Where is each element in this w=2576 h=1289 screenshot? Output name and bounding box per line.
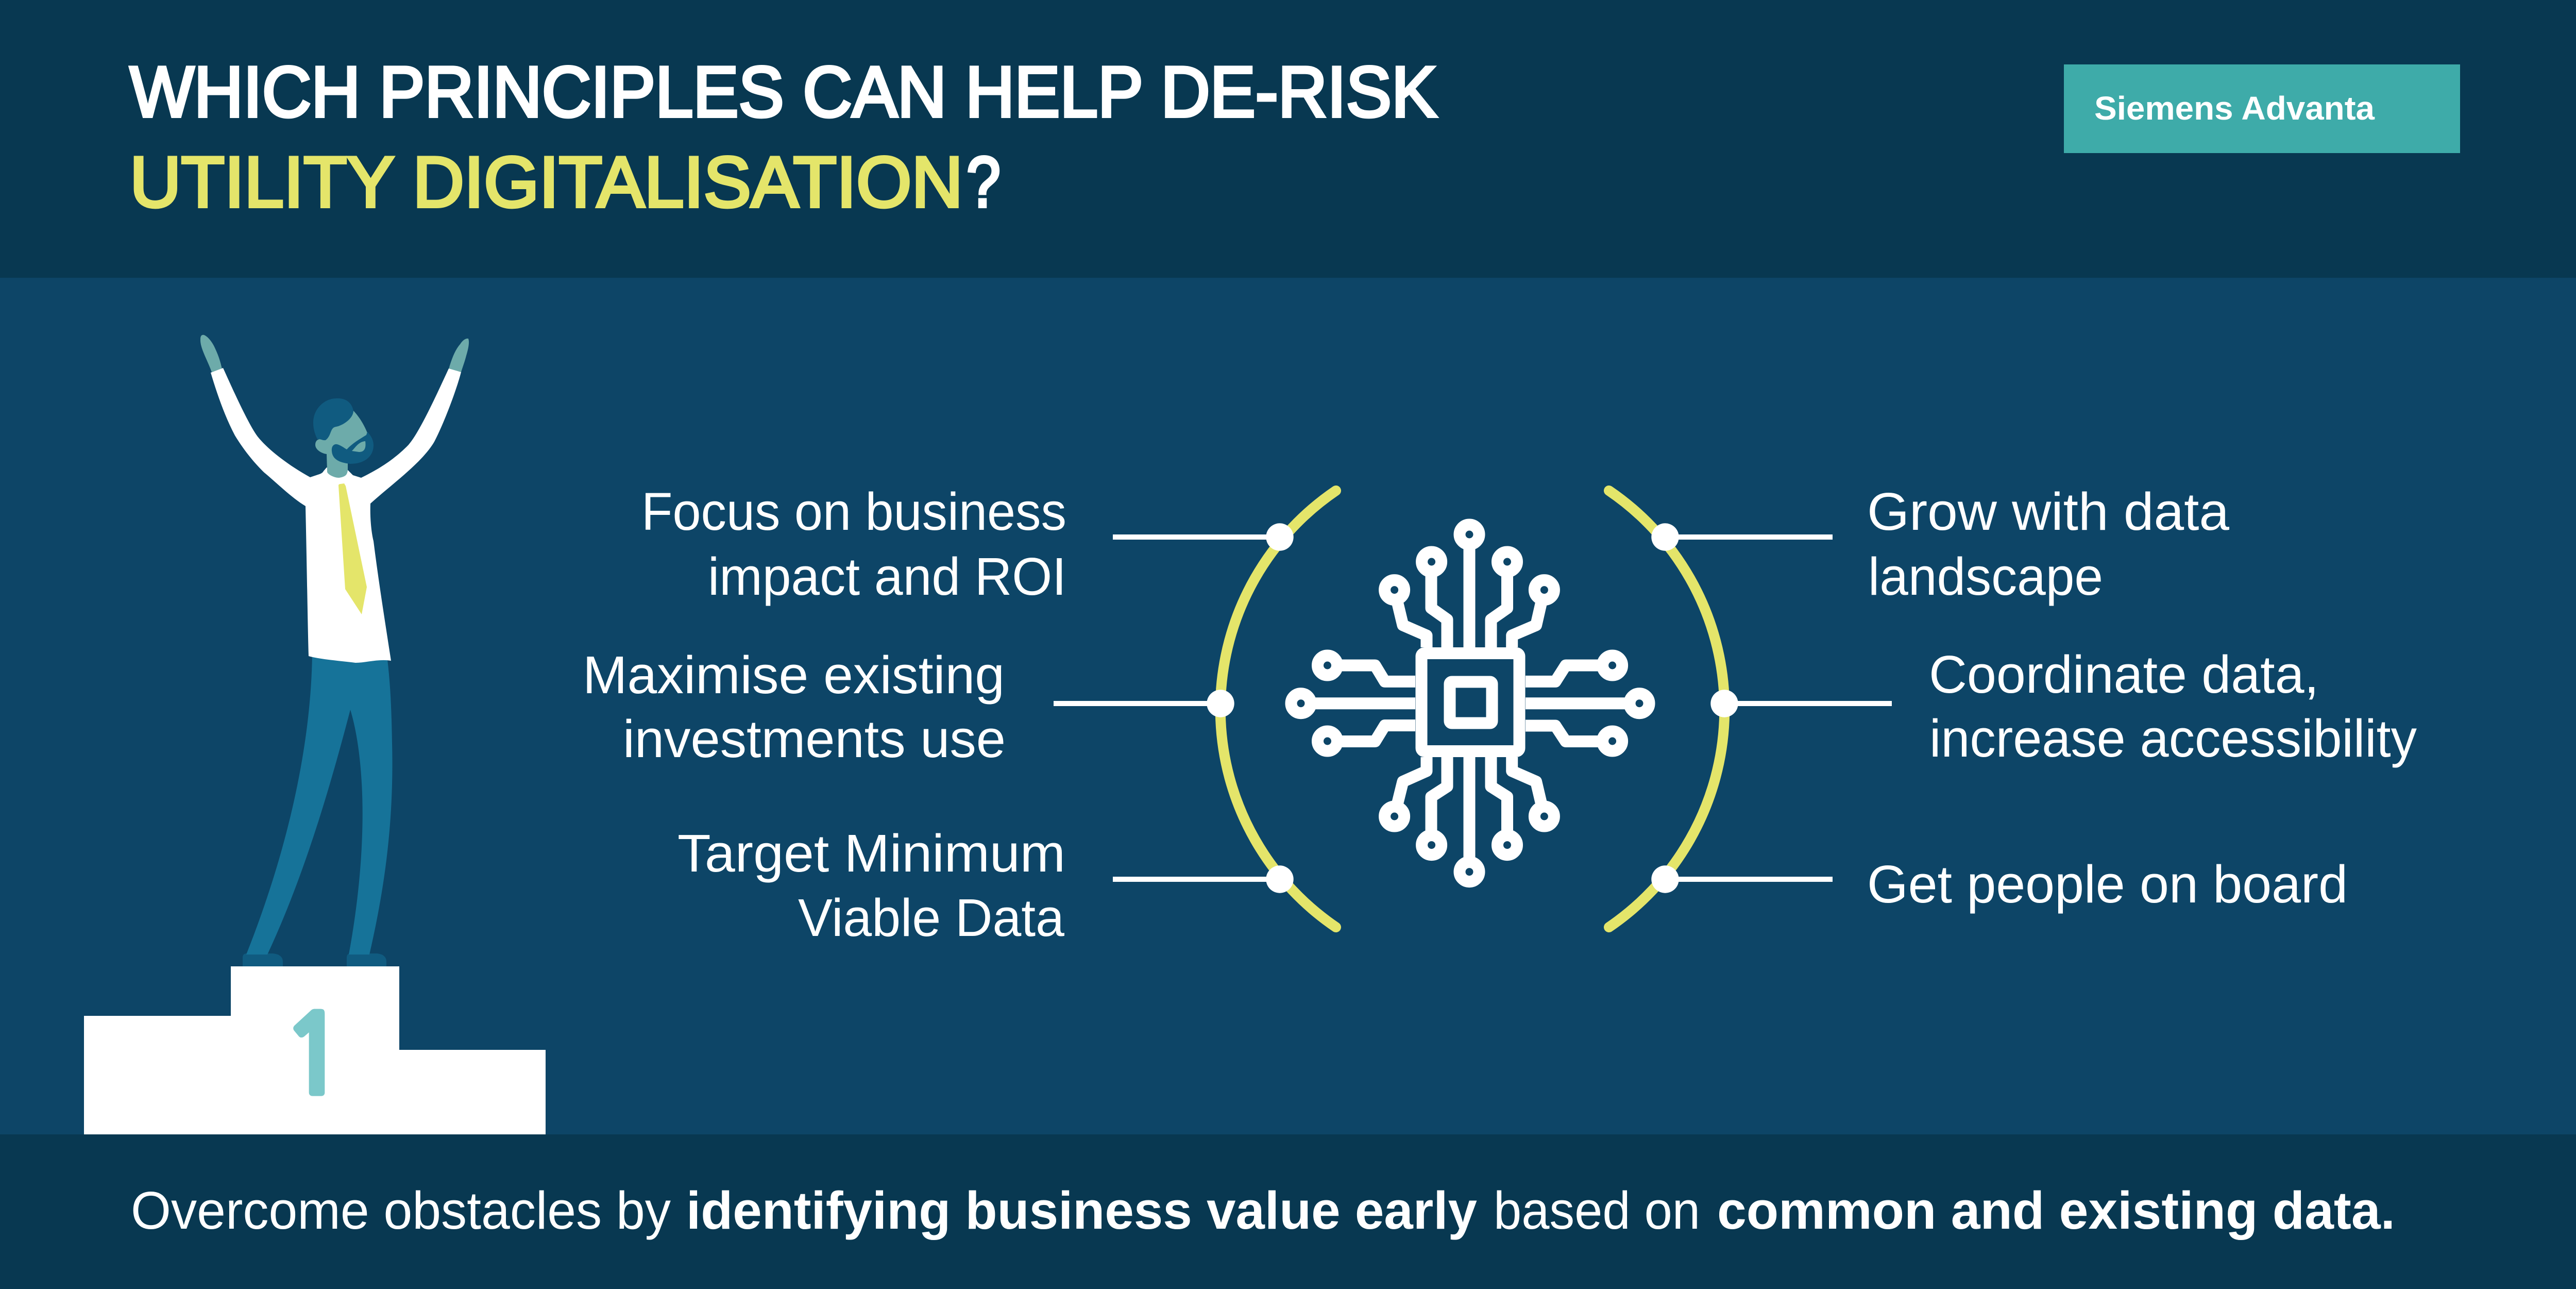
diagram: principles around chip: [583, 482, 2417, 947]
label: Grow with data landscape: landscape: [1868, 547, 2103, 606]
icon: circuit chip: [1291, 525, 1649, 882]
right bracket arc: [1609, 491, 1724, 927]
connector dots: [1207, 523, 1738, 893]
trousers: [246, 655, 393, 955]
label: Maximise existing investments use: [583, 645, 1006, 768]
label: Coordinate data, increase accessibility: [1929, 645, 2417, 768]
label: Target Minimum Viable Data: Viable Data: [798, 888, 1065, 947]
label: Focus on business impact and ROI: [641, 482, 1066, 606]
podium number 1: 1: [281, 1002, 347, 1110]
label: Target Minimum Viable Data: [677, 824, 1065, 947]
label: Grow with data landscape: [1867, 482, 2230, 606]
footer statement: [131, 1181, 2395, 1240]
shoes: [243, 953, 386, 966]
footer statement: based on: [1494, 1181, 1700, 1240]
hair: [313, 398, 353, 440]
logo badge: Siemens Advanta: [2064, 64, 2460, 153]
label: Coordinate data, increase accessibility: Coordinate data,: [1929, 645, 2319, 704]
label: Focus on business impact and ROI: Focus on business: [641, 482, 1066, 541]
hands: [200, 335, 469, 372]
panel: main background: [0, 278, 2576, 1134]
illustration: winner on podium: [84, 335, 546, 1134]
title: UTILITY DIGITALISATION: [130, 142, 963, 222]
title: WHICH PRINCIPLES CAN HELP DE-RISK: [130, 52, 1437, 132]
label: Coordinate data, increase accessibility: increase accessibility: [1929, 709, 2417, 768]
shirt: [211, 368, 461, 663]
connector lines: [1054, 537, 1892, 879]
title: ?: [967, 142, 1001, 222]
label: Target Minimum Viable Data: Target Minimum: [677, 824, 1065, 883]
neck and face: [315, 411, 367, 478]
label: Focus on business impact and ROI: impact and ROI: [708, 547, 1066, 606]
beard: [332, 432, 374, 464]
label: Get people on board: Get people on board: [1867, 855, 2348, 914]
podium: [84, 966, 546, 1134]
panel: footer: [0, 1134, 2576, 1289]
panel: header: [0, 0, 2576, 278]
logo badge: Siemens Advanta: Siemens Advanta: [2094, 90, 2375, 127]
footer statement: common and existing data.: [1717, 1181, 2395, 1240]
label: Maximise existing investments use: Maximise existing: [583, 645, 1005, 705]
footer statement: identifying business value early: [686, 1181, 1477, 1240]
mouth: [352, 441, 366, 452]
left bracket arc: [1221, 491, 1336, 927]
label: Maximise existing investments use: investments use: [623, 709, 1006, 768]
tie: [338, 483, 367, 614]
title: [130, 52, 1437, 222]
label: Grow with data landscape: Grow with data: [1867, 482, 2230, 541]
footer statement: Overcome obstacles by: [131, 1181, 671, 1240]
